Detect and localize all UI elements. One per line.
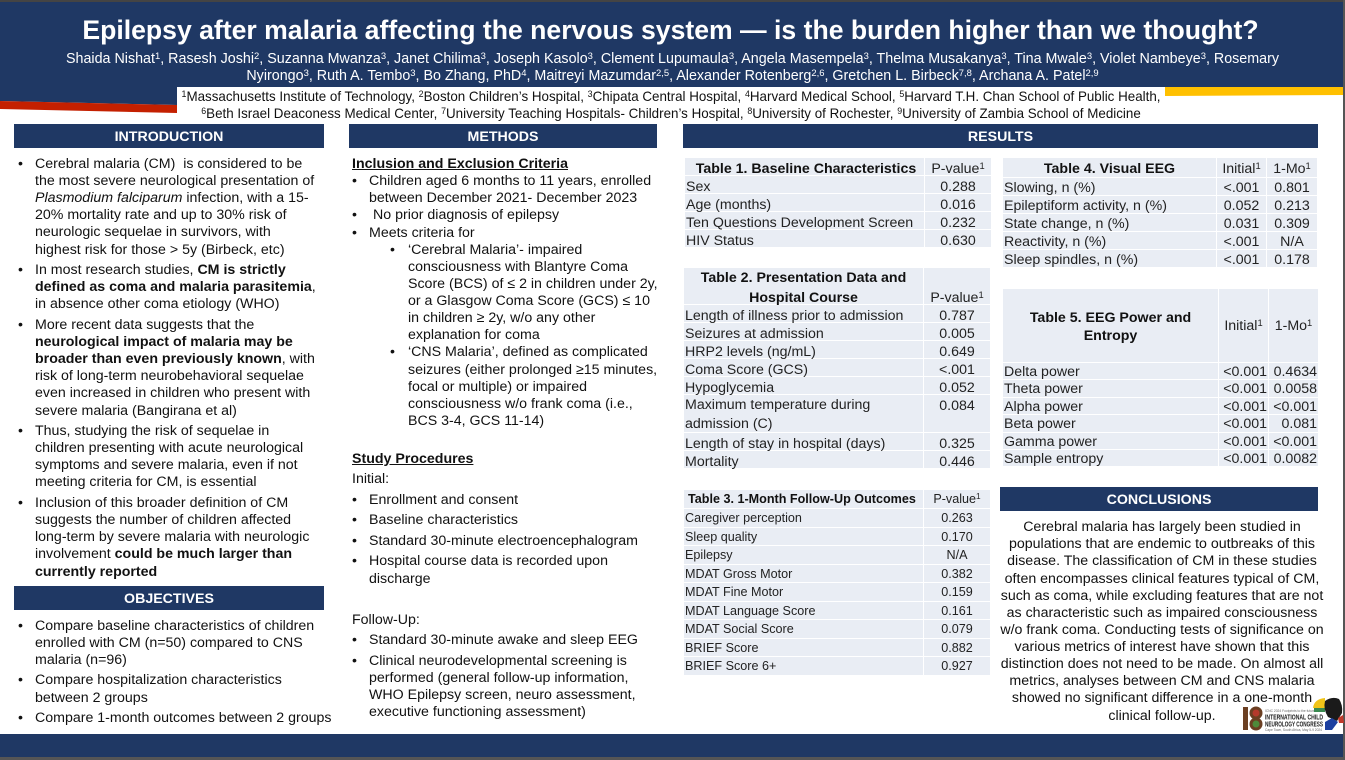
table 4: visual EEG: Epileptiform activity, n (%) — [1004, 198, 1167, 214]
text block: study procedures: Standard 30-minute electroencephalogram — [369, 533, 638, 549]
text block: introduction: the most severe neurological presentation of — [35, 173, 314, 189]
text block: objectives: between 2 groups — [35, 690, 148, 706]
table 1: baseline characteristics: Table 1. Baseline Characteristics — [696, 161, 916, 177]
text block: study procedures: WHO Epilepsy screen, neuro assessment, — [369, 687, 636, 703]
text block: study procedures: Clinical neurodevelopmental screening is — [369, 653, 627, 669]
text block: conclusions: such as coma, while excluding features that are not — [1001, 588, 1323, 604]
text block: introduction: defined as coma and malaria parasitemia, — [35, 279, 316, 295]
table 5: EEG power and entropy: 0.4634 — [1274, 364, 1317, 380]
text block: study procedures: Standard 30-minute awake and sleep EEG — [369, 632, 638, 648]
table 3: 1-month follow-up outcomes: MDAT Social Score — [685, 622, 794, 636]
table 3: 1-month follow-up outcomes: N/A — [946, 548, 968, 562]
text block: introduction: More recent data suggests that the — [35, 317, 254, 333]
heading: introduction: INTRODUCTION — [115, 129, 223, 145]
text block: objectives: malaria (n=96) — [35, 652, 127, 668]
text block: inclusion and exclusion criteria: between December 2021- December 2023 — [369, 190, 637, 206]
heading: introduction — [14, 124, 324, 148]
table 5: EEG power and entropy: <0.001 — [1273, 399, 1317, 415]
table 5: EEG power and entropy: 0.081 — [1281, 416, 1317, 432]
text block: introduction: neurological impact of malaria may be — [35, 334, 293, 350]
text block: study procedures: Hospital course data is recorded upon — [369, 553, 608, 569]
text block: inclusion and exclusion criteria: consciousness w/o frank coma (i.e., — [408, 396, 633, 412]
table 5: EEG power and entropy: Delta power — [1004, 364, 1080, 380]
heading: methods — [349, 124, 657, 148]
table 2: presentation data and hospital course: Maximum temperature during — [685, 397, 870, 413]
text block: inclusion and exclusion criteria: explanation for coma — [408, 327, 540, 343]
text block: conclusions: w/o frank coma. Conducting tests of significance on — [1000, 622, 1324, 638]
text block: study procedures — [352, 451, 638, 720]
text block: inclusion and exclusion criteria — [352, 156, 658, 429]
table 3: 1-month follow-up outcomes: 0.882 — [941, 640, 973, 654]
text block: study procedures: Study Procedures — [352, 451, 473, 467]
text block: introduction: long-term by severe malaria with neurologic — [35, 529, 309, 545]
right edge line — [1343, 0, 1345, 760]
table 1: baseline characteristics: 0.630 — [940, 233, 976, 249]
table 4: visual EEG: 0.031 — [1224, 216, 1259, 232]
table 1: baseline characteristics: Sex — [686, 179, 710, 195]
text block: objectives: enrolled with CM (n=50) compared to CNS — [35, 635, 303, 651]
text block: introduction: • — [18, 156, 23, 172]
table 5: EEG power and entropy: Theta power — [1004, 381, 1083, 397]
table 2: presentation data and hospital course: <.001 — [939, 362, 975, 378]
text block: introduction: even increased in children who present with — [35, 385, 310, 401]
table 1: baseline characteristics: Age (months) — [686, 197, 771, 213]
text block: introduction: Cerebral malaria (CM) is considered to be — [35, 156, 302, 172]
table 1: baseline characteristics: 0.288 — [940, 179, 976, 195]
icon: congress logo: Cape Town, South Africa, May 5-9 2024 — [1265, 728, 1322, 732]
table 4: visual EEG: <.001 — [1224, 252, 1259, 268]
table 3: 1-month follow-up outcomes: BRIEF Score — [685, 640, 758, 654]
table 2: presentation data and hospital course: Table 2. Presentation Data and — [701, 270, 906, 286]
table 4: visual EEG: 1-Mo1 — [1273, 161, 1311, 177]
text block: introduction: severe malaria (Bangirana et al) — [35, 403, 237, 419]
heading: results — [683, 124, 1318, 148]
table 3: 1-month follow-up outcomes: 0.170 — [941, 530, 973, 544]
text block: objectives: Compare 1-month outcomes between 2 groups — [35, 710, 332, 726]
table 3: 1-month follow-up outcomes: Epilepsy — [685, 548, 733, 562]
text block: introduction: 20% mortality rate and up to 30% risk of — [35, 207, 287, 223]
text block: study procedures: Enrollment and consent — [369, 492, 518, 508]
top edge line — [0, 0, 1345, 2]
text block: introduction: • — [18, 317, 23, 333]
table 2: presentation data and hospital course: 0.084 — [939, 398, 975, 414]
affiliations: 6Beth Israel Deaconess Medical Center, 7University Teaching Hospitals- Children’s Hospital, 8University of Rochester, 9University of Zambia School of Medicine — [201, 106, 1141, 120]
text block: inclusion and exclusion criteria: or a Glasgow Coma Score (GCS) ≤ 10 — [408, 293, 650, 309]
text block: introduction: neurologic sequelae in survivors, with — [35, 224, 271, 240]
authors: Shaida Nishat1, Rasesh Joshi2, Suzanna Mwanza3, Janet Chilima3, Joseph Kasolo3, Clement Lupumaula3, Angela Masempela3, Thelma Musakanya3, Tina Mwale3, Violet Nambeye3, Rosemary — [66, 50, 1279, 67]
table 2: presentation data and hospital course: Coma Score (GCS) — [685, 362, 808, 378]
table 4: visual EEG: <.001 — [1224, 234, 1259, 250]
table 5: EEG power and entropy: Alpha power — [1004, 399, 1083, 415]
table 5: EEG power and entropy: 0.0082 — [1274, 451, 1317, 467]
table 1: baseline characteristics: HIV Status — [686, 233, 754, 249]
text block: introduction: • — [18, 495, 23, 511]
table 4: visual EEG: Table 4. Visual EEG — [1044, 161, 1175, 177]
text block: inclusion and exclusion criteria: Score (BCS) of ≤ 2 in children under 2y, — [408, 276, 658, 292]
table 2: presentation data and hospital course: 0.649 — [939, 344, 975, 360]
table 2: presentation data and hospital course: admission (C) — [685, 416, 773, 432]
table 2: presentation data and hospital course: Mortality — [685, 454, 739, 470]
affiliations: 1Massachusetts Institute of Technology, 2Boston Children’s Hospital, 3Chipata Central Hospital, 4Harvard Medical School, 5Harvard T.H. Chan School of Public Health, — [182, 89, 1160, 104]
text block: conclusions: Cerebral malaria has largely been studied in — [1023, 519, 1301, 535]
table 1: baseline characteristics: 0.232 — [940, 215, 976, 231]
table 3: 1-month follow-up outcomes — [684, 490, 990, 674]
text block: introduction: Inclusion of this broader definition of CM — [35, 495, 288, 511]
table 2: presentation data and hospital course: 0.005 — [939, 326, 975, 342]
table 2: presentation data and hospital course — [684, 268, 990, 468]
footer bar — [0, 734, 1345, 757]
text block: study procedures: Baseline characteristics — [369, 512, 518, 528]
text block: conclusions: showed no significant difference in a one-month — [1012, 690, 1312, 706]
text block: study procedures: Initial: — [352, 471, 389, 487]
table 2: presentation data and hospital course: Seizures at admission — [685, 326, 824, 342]
authors — [66, 50, 1279, 84]
table 5: EEG power and entropy: <0.001 — [1273, 434, 1317, 450]
text block: inclusion and exclusion criteria: Inclusion and Exclusion Criteria — [352, 156, 568, 172]
text block: study procedures: executive functioning assessment) — [369, 704, 586, 720]
icon: congress logo: ICNC 2024 Footprints to the future — [1265, 709, 1315, 713]
table 1: baseline characteristics — [685, 158, 991, 247]
text block: conclusions: disease. The classification of CM in these studies — [1007, 553, 1317, 569]
heading: conclusions: CONCLUSIONS — [1107, 492, 1211, 508]
table 5: EEG power and entropy: Initial1 — [1224, 318, 1263, 334]
affiliations — [177, 87, 1165, 123]
table 2: presentation data and hospital course: 0.446 — [939, 454, 975, 470]
icon: congress logo — [1243, 698, 1344, 732]
table 3: 1-month follow-up outcomes: 0.927 — [941, 659, 973, 673]
text block: study procedures: • — [352, 533, 357, 549]
table 1: baseline characteristics: 0.016 — [940, 197, 976, 213]
text block: introduction: • — [18, 262, 23, 278]
text block: inclusion and exclusion criteria: in children ≥ 2y, w/o any other — [408, 310, 595, 326]
text block: objectives — [18, 618, 332, 726]
text block: introduction: symptoms and severe malaria, even if not — [35, 457, 298, 473]
header banner — [0, 2, 1343, 113]
text block: introduction — [18, 156, 316, 580]
text block: introduction: suggests the number of children affected — [35, 512, 291, 528]
table 2: presentation data and hospital course: HRP2 levels (ng/mL) — [685, 344, 816, 360]
text block: introduction: children presenting with acute neurological — [35, 440, 303, 456]
table 5: EEG power and entropy: <0.001 — [1223, 416, 1267, 432]
table 2: presentation data and hospital course: 0.052 — [939, 380, 975, 396]
text block: inclusion and exclusion criteria: ‘CNS Malaria’, defined as complicated — [408, 344, 648, 360]
text block: introduction: • — [18, 423, 23, 439]
table 2: presentation data and hospital course: P-value1 — [930, 290, 984, 306]
text block: inclusion and exclusion criteria: • — [352, 173, 357, 189]
text block: study procedures: • — [352, 492, 357, 508]
table 2: presentation data and hospital course: Length of stay in hospital (days) — [685, 436, 885, 452]
heading: results: RESULTS — [968, 129, 1033, 145]
heading: conclusions — [1000, 487, 1318, 511]
title: Epilepsy after malaria affecting the nervous system — is the burden higher than we thought? — [82, 15, 1259, 45]
table 5: EEG power and entropy: <0.001 — [1223, 364, 1267, 380]
table 4: visual EEG: Slowing, n (%) — [1004, 180, 1095, 196]
table 3: 1-month follow-up outcomes: Caregiver perception — [685, 511, 802, 525]
table 3: 1-month follow-up outcomes: 0.161 — [941, 604, 973, 618]
table 3: 1-month follow-up outcomes: MDAT Fine Motor — [685, 585, 783, 599]
text block: study procedures: performed (general follow-up information, — [369, 670, 628, 686]
text block: study procedures: • — [352, 653, 357, 669]
table 3: 1-month follow-up outcomes: BRIEF Score 6+ — [685, 659, 776, 673]
text block: introduction: highest risk for those > 5y (Birbeck, etc) — [35, 242, 285, 258]
text block: introduction: broader than even previously known, with — [35, 351, 315, 367]
text block: objectives: Compare hospitalization characteristics — [35, 672, 282, 688]
table 5: EEG power and entropy: Beta power — [1004, 416, 1076, 432]
text block: objectives: • — [18, 710, 23, 726]
table 5: EEG power and entropy: Entropy — [1084, 328, 1137, 344]
text block: conclusions: often encompasses clinical features typical of CM, — [1005, 571, 1319, 587]
table 5: EEG power and entropy: 0.0058 — [1274, 381, 1317, 397]
text block: inclusion and exclusion criteria: focal or multiple) or impaired — [408, 379, 587, 395]
table 3: 1-month follow-up outcomes: 0.382 — [941, 566, 973, 580]
table 4: visual EEG: N/A — [1280, 234, 1304, 250]
text block: inclusion and exclusion criteria: • — [390, 242, 395, 258]
text block: conclusions: metrics, analyses between CM and CNS malaria — [1009, 673, 1315, 689]
table 3: 1-month follow-up outcomes: MDAT Gross Motor — [685, 566, 792, 580]
table 2: presentation data and hospital course: 0.325 — [939, 436, 975, 452]
table 5: EEG power and entropy — [1003, 289, 1318, 466]
table 4: visual EEG: <.001 — [1224, 180, 1259, 196]
table 4: visual EEG: State change, n (%) — [1004, 216, 1129, 232]
text block: inclusion and exclusion criteria: No prior diagnosis of epilepsy — [373, 207, 559, 223]
table 2: presentation data and hospital course: 0.787 — [939, 308, 975, 324]
table 4: visual EEG: Sleep spindles, n (%) — [1004, 252, 1138, 268]
text block: introduction: Plasmodium falciparum infection, with a 15- — [35, 190, 309, 206]
text block: objectives: Compare baseline characteristics of children — [35, 618, 314, 634]
text block: introduction: In most research studies, CM is strictly — [35, 262, 286, 278]
table 4: visual EEG: Initial1 — [1222, 161, 1261, 177]
table 4: visual EEG: 0.309 — [1274, 216, 1310, 232]
heading: objectives: OBJECTIVES — [124, 591, 214, 607]
text block: study procedures: discharge — [369, 571, 431, 587]
text block: inclusion and exclusion criteria: • — [352, 225, 357, 241]
table 3: 1-month follow-up outcomes: MDAT Language Score — [685, 604, 815, 618]
table 3: 1-month follow-up outcomes: Sleep quality — [685, 530, 757, 544]
table 1: baseline characteristics: P-value1 — [931, 161, 985, 177]
table 5: EEG power and entropy: <0.001 — [1223, 434, 1267, 450]
text block: inclusion and exclusion criteria: BCS 3-4, GCS 11-14) — [408, 413, 544, 429]
table 3: 1-month follow-up outcomes: 0.263 — [941, 511, 973, 525]
table 5: EEG power and entropy: Gamma power — [1004, 434, 1097, 450]
text block: objectives: • — [18, 618, 23, 634]
heading: methods: METHODS — [468, 129, 538, 145]
table 5: EEG power and entropy: 1-Mo1 — [1275, 318, 1312, 334]
text block: introduction: in absence other coma etiology (WHO) — [35, 296, 279, 312]
table 5: EEG power and entropy: Sample entropy — [1004, 451, 1103, 467]
table 3: 1-month follow-up outcomes: 0.159 — [941, 585, 973, 599]
table 4: visual EEG: 0.213 — [1274, 198, 1310, 214]
text block: conclusions: populations that are endemic to outbreaks of this — [1009, 536, 1315, 552]
table 4: visual EEG: 0.801 — [1274, 180, 1310, 196]
authors: Nyirongo3, Ruth A. Tembo3, Bo Zhang, PhD4, Maitreyi Mazumdar2,5, Alexander Rotenberg2,6, Gretchen L. Birbeck7,8, Archana A. Patel2,9 — [246, 67, 1099, 84]
text block: objectives: • — [18, 672, 23, 688]
text block: introduction: involvement could be much larger than — [35, 546, 292, 562]
table 4: visual EEG — [1003, 158, 1317, 267]
table 4: visual EEG: 0.052 — [1224, 198, 1259, 214]
table 2: presentation data and hospital course: Length of illness prior to admission — [685, 308, 903, 324]
table 2: presentation data and hospital course: Hypoglycemia — [685, 380, 774, 396]
table 1: baseline characteristics: Ten Questions Development Screen — [686, 215, 913, 231]
text block: introduction: meeting criteria for CM, is essential — [35, 474, 257, 490]
text block: conclusions: various metrics of interest have shown that this — [1015, 639, 1309, 655]
table 2: presentation data and hospital course: Hospital Course — [749, 290, 858, 306]
table 5: EEG power and entropy: <0.001 — [1223, 399, 1267, 415]
text block: inclusion and exclusion criteria: consciousness with Blantyre Coma — [408, 259, 628, 275]
text block: introduction: risk of long-term neurobehavioral sequelae — [35, 368, 304, 384]
text block: conclusions: distinction does not need to be made. On almost all — [1001, 656, 1323, 672]
text block: inclusion and exclusion criteria: Meets criteria for — [369, 225, 475, 241]
table 3: 1-month follow-up outcomes: Table 3. 1-Month Follow-Up Outcomes — [688, 492, 916, 506]
text block: introduction: currently reported — [35, 564, 157, 580]
text block: conclusions: as characteristic such as impaired consciousness — [1007, 605, 1317, 621]
text block: conclusions: clinical follow-up. — [1108, 708, 1216, 724]
heading: objectives — [14, 586, 324, 610]
text block: introduction: Thus, studying the risk of sequelae in — [35, 423, 269, 439]
text block: study procedures: • — [352, 632, 357, 648]
table 5: EEG power and entropy: Table 5. EEG Power and — [1030, 310, 1191, 326]
text block: study procedures: • — [352, 553, 357, 569]
table 5: EEG power and entropy: <0.001 — [1223, 381, 1267, 397]
table 4: visual EEG: Reactivity, n (%) — [1004, 234, 1106, 250]
bottom edge line — [0, 757, 1345, 760]
text block: inclusion and exclusion criteria: ‘Cerebral Malaria’- impaired — [408, 242, 582, 258]
text block: study procedures: Follow-Up: — [352, 612, 420, 628]
table 4: visual EEG: 0.178 — [1274, 252, 1310, 268]
table 5: EEG power and entropy: <0.001 — [1223, 451, 1267, 467]
text block: conclusions — [1000, 519, 1324, 724]
text block: inclusion and exclusion criteria: Children aged 6 months to 11 years, enrolled — [369, 173, 651, 189]
table 3: 1-month follow-up outcomes: 0.079 — [941, 622, 973, 636]
text block: inclusion and exclusion criteria: • — [352, 207, 357, 223]
table 3: 1-month follow-up outcomes: P-value1 — [933, 491, 981, 506]
text block: inclusion and exclusion criteria: • — [390, 344, 395, 360]
text block: study procedures: • — [352, 512, 357, 528]
text block: inclusion and exclusion criteria: seizures (either prolonged ≥15 minutes, — [408, 362, 657, 378]
